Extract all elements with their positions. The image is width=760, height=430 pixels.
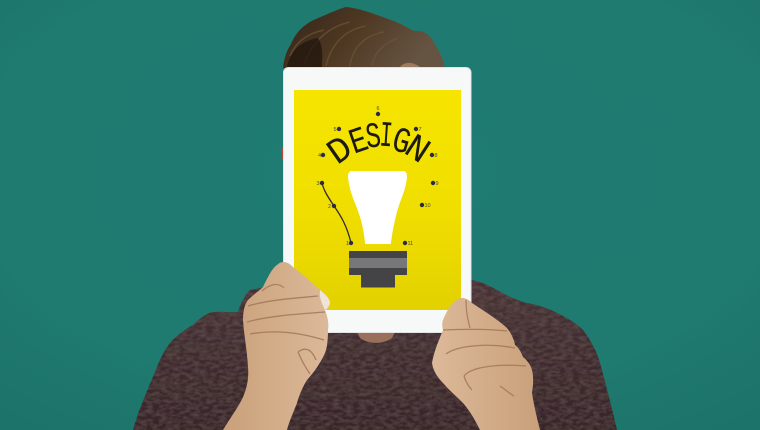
ear sliver: [282, 146, 284, 159]
dot numbers: 1: [346, 241, 349, 247]
light bulb glass: [348, 171, 407, 244]
DESIGN lettering on an arc: N: [396, 127, 437, 173]
hair: [283, 7, 445, 68]
dot numbers: 4: [318, 153, 321, 159]
connect-the-dots points: [320, 112, 435, 245]
DESIGN lettering on an arc: E: [344, 120, 374, 164]
dot numbers: 9: [436, 181, 439, 187]
left hand: [223, 262, 330, 430]
dot numbers: 11: [408, 241, 413, 247]
DESIGN lettering on an arc: G: [387, 120, 415, 164]
DESIGN lettering on an arc: S: [363, 117, 383, 159]
dot numbers: [316, 106, 439, 247]
dot numbers: 3: [316, 181, 320, 187]
drawn line joining dots 1 to 3: [322, 183, 351, 243]
tablet screen: [294, 90, 461, 310]
dot numbers: 10: [424, 203, 431, 209]
dot numbers: 6: [376, 106, 380, 112]
DESIGN lettering on an arc: I: [378, 115, 394, 157]
DESIGN lettering on an arc: D: [320, 128, 361, 174]
dot numbers: 7: [418, 127, 422, 133]
light bulb base: [349, 251, 407, 288]
dot numbers: 5: [334, 127, 337, 133]
dot numbers: 8: [434, 153, 438, 159]
neck: [356, 330, 396, 343]
shirt: [133, 280, 617, 430]
right hand: [432, 298, 540, 430]
tablet body: [284, 68, 471, 332]
DESIGN lettering on an arc: [320, 115, 437, 174]
dot numbers: 2: [328, 204, 331, 210]
tablet: [284, 68, 471, 332]
